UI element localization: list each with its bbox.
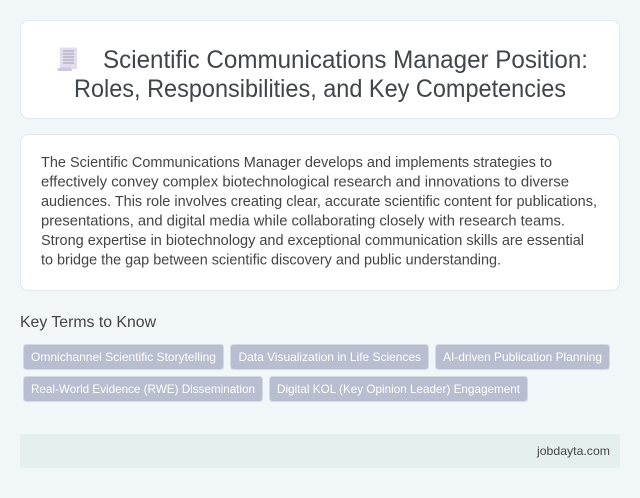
title: Roles, Responsibilities, and Key Competencies [74,75,566,103]
description text: to bridge the gap between scientific discovery and public understanding. [41,252,501,268]
panel: title card [20,20,620,118]
heading: key terms: Key Terms to Know [20,314,156,331]
tag: digital KOL: Digital KOL (Key Opinion Leader) Engagement [277,382,521,396]
footer bar [20,434,620,468]
tag: data visualization: Data Visualization in Life Sciences [238,350,421,364]
tag: real-world evidence: Real-World Evidence (RWE) Dissemination [31,382,255,396]
title [74,46,588,103]
tag: publication planning: AI-driven Publication Planning [443,350,602,364]
tag: publication planning [436,344,610,370]
footer bar: jobdayta.com [536,444,610,458]
description text [41,155,597,268]
description text: audiences. This role involves creating clear, accurate scientific content for publications, [41,194,597,210]
description text: presentations, and digital media while collaborating closely with research teams. [41,214,565,230]
title: Scientific Communications Manager Position: [103,46,588,74]
description text: Strong expertise in biotechnology and exceptional communication skills are essential [41,233,584,249]
tag: digital KOL [270,376,528,402]
tag: real-world evidence [24,376,262,402]
tag: omnichannel storytelling: Omnichannel Scientific Storytelling [31,350,216,364]
tag: data visualization [230,344,428,370]
tag: omnichannel storytelling [24,344,224,370]
description text: effectively convey complex biotechnological research and innovations to diverse [41,174,569,190]
panel: description card [20,134,620,290]
icon: document scroll [57,48,77,71]
description text: The Scientific Communications Manager develops and implements strategies to [41,155,552,171]
